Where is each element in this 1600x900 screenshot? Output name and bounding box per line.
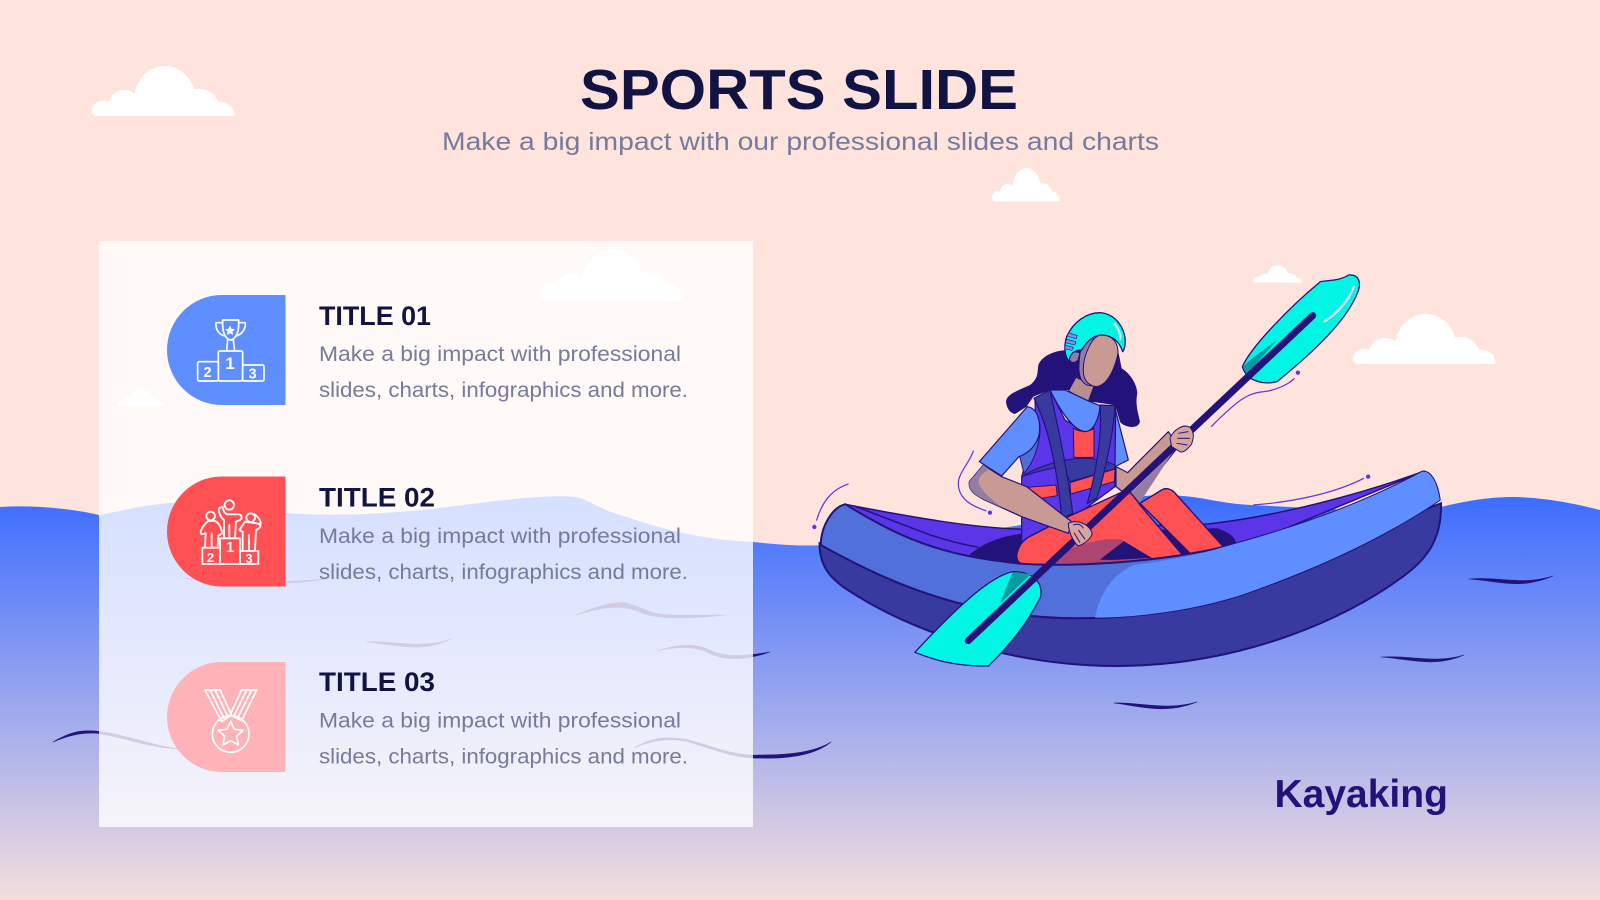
belly band — [1022, 458, 1115, 482]
subtitle: Make a big impact with our professional slides and charts — [442, 128, 1159, 156]
item 3 — [167, 662, 688, 772]
leg shadow — [1050, 539, 1123, 566]
lower paddle blade — [915, 572, 1041, 666]
right highlight — [1095, 472, 1440, 618]
hand on paddle — [1170, 426, 1193, 452]
cloud: behind panel — [539, 249, 683, 299]
vest — [1022, 390, 1116, 547]
near leg — [1017, 490, 1183, 566]
body text 01 — [319, 342, 688, 402]
right sleeve — [1115, 411, 1128, 467]
cloud: right small — [1253, 265, 1302, 283]
body text 03: Make a big impact with professional — [319, 708, 681, 732]
red strip — [1027, 485, 1057, 498]
straps — [1034, 390, 1115, 518]
icon badge: medal — [167, 662, 286, 772]
heading 01: TITLE 01 — [319, 301, 431, 331]
icon badge: trophy podium: 3 — [248, 366, 257, 382]
hand on knee — [1068, 522, 1092, 546]
caption: Kayaking — [1274, 773, 1448, 816]
icon badge: athletes on podium: 1 — [226, 539, 234, 556]
title: SPORTS SLIDE — [580, 58, 1018, 122]
kayak illustration — [812, 275, 1441, 666]
hands — [1068, 426, 1193, 546]
icon badge: trophy podium: 1 — [225, 354, 235, 373]
body text 03: slides, charts, infographics and more. — [319, 744, 688, 768]
hull — [820, 503, 1441, 666]
icon badge: athletes on podium: 2 — [207, 550, 214, 565]
cloud: top centre — [992, 168, 1060, 201]
face — [1083, 335, 1118, 387]
neck — [1068, 377, 1094, 402]
ear and shaded side of head — [1069, 337, 1110, 387]
left sleeve — [979, 407, 1040, 476]
helmet — [1065, 313, 1125, 362]
icon badge: trophy podium — [167, 295, 286, 405]
upper band — [821, 472, 1440, 618]
body text 02: Make a big impact with professional — [319, 524, 681, 548]
cloud: right large — [1353, 314, 1496, 364]
hair — [1006, 350, 1140, 427]
panel — [99, 241, 753, 827]
cloud: top left — [92, 66, 235, 116]
collar — [1050, 390, 1100, 432]
far leg — [1140, 489, 1223, 555]
icon badge: trophy podium: 2 — [203, 365, 212, 381]
right arm — [1116, 432, 1178, 495]
kayak body — [820, 275, 1441, 666]
body text 01: Make a big impact with professional — [319, 342, 681, 366]
helmet vents — [1065, 333, 1077, 350]
left arm — [969, 465, 1072, 533]
body text 02 — [319, 524, 688, 584]
vest red panel — [1073, 428, 1094, 457]
item 2 — [167, 476, 688, 586]
motion wisps and kayak interior — [812, 370, 1425, 570]
paddle shaft — [968, 316, 1313, 641]
heading 03: TITLE 03 — [319, 667, 435, 697]
icon badge: athletes on podium: 3 — [245, 551, 253, 566]
icon badge: athletes on podium — [167, 476, 286, 586]
body text 03 — [319, 708, 688, 768]
sleeve shadow — [1019, 425, 1040, 473]
body text 01: slides, charts, infographics and more. — [319, 378, 688, 402]
body text 02: slides, charts, infographics and more. — [319, 560, 688, 584]
water — [0, 495, 1600, 900]
person — [969, 313, 1223, 566]
water ripples — [53, 576, 1553, 758]
upper paddle blade — [1242, 275, 1359, 383]
cloud: small behind panel — [117, 388, 165, 407]
heading 02: TITLE 02 — [319, 482, 435, 512]
item 1 — [167, 295, 688, 405]
